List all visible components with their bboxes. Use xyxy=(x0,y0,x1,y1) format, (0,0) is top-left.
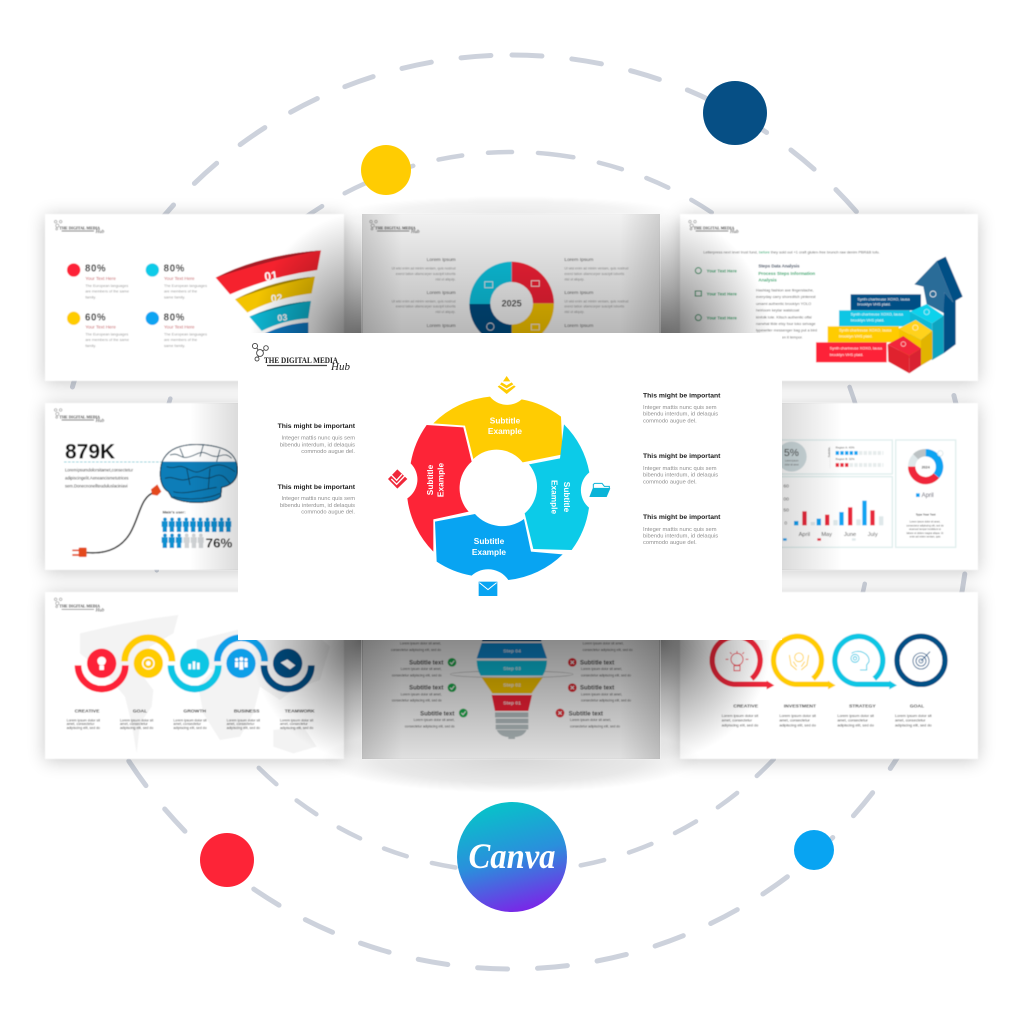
descriptions: amet, consectetur xyxy=(779,719,810,723)
right labels: consectetur adipiscing elit, sed do xyxy=(581,673,631,677)
middle text column: Process Steps Information xyxy=(758,271,815,276)
right captions: exerci tation ullamcorper suscipit lobortis xyxy=(564,272,625,276)
right captions: nisl ut aliquip. xyxy=(564,277,585,281)
shading: bottom middle slide xyxy=(362,640,660,759)
left labels: Lorem ipsum dolor sit amet, xyxy=(400,642,441,646)
donut chart: 2025 xyxy=(502,299,522,309)
left labels: consectetur adipiscing elit, sed do xyxy=(405,724,455,728)
funnel chart xyxy=(216,250,321,338)
right captions: Ut wisi enim ad minim veniam, quis nostrud xyxy=(564,267,628,271)
donut chart xyxy=(469,262,554,346)
stat: cyan 80%: same family. xyxy=(164,296,185,300)
shading: cast on neighbouring slides xyxy=(190,196,842,793)
right labels: consectetur adipiscing elit, sed do xyxy=(570,724,620,728)
left captions: Lorem Ipsum xyxy=(427,323,456,329)
step descriptions: adipiscing elit, sed do xyxy=(173,726,207,730)
left labels: consectetur adipiscing elit, sed do xyxy=(392,673,442,677)
middle text column: Hashtag fashion axe fingerstache, xyxy=(756,289,814,293)
staircase chart: brooklyn VHS plaid. xyxy=(839,335,873,339)
stat: cyan 80%: Your Text Here xyxy=(164,276,195,281)
labels xyxy=(733,703,924,709)
slide: staircase arrow xyxy=(680,214,978,381)
right labels: Lorem ipsum dolor sit amet, xyxy=(581,667,622,671)
right labels: Lorem ipsum dolor sit amet, xyxy=(583,642,624,646)
left labels: Subtitle text xyxy=(409,686,443,692)
slide: light bulb steps xyxy=(362,592,660,759)
left text blocks: bibendu interdum, id delaquis xyxy=(280,442,355,448)
canva badge xyxy=(457,802,567,912)
bar chart: July xyxy=(868,532,878,538)
left labels: consectetur adipiscing elit, sed do xyxy=(392,699,442,703)
left captions: exerci tation ullamcorper suscipit lobortis xyxy=(396,272,456,276)
right text blocks: Integer mattis nunc quis sem xyxy=(643,527,717,533)
logo xyxy=(370,220,420,235)
right text blocks: commodo augue del. xyxy=(643,540,697,546)
left captions: nisl ut aliquip. xyxy=(435,277,456,281)
right labels: consectetur adipiscing elit, sed do xyxy=(581,699,631,703)
step labels: TEAMWORK xyxy=(285,709,315,715)
stat: red 80%: The European languages xyxy=(85,284,128,288)
description xyxy=(65,468,134,488)
descriptions: amet, consectetur xyxy=(837,719,868,723)
donut card: 2024 xyxy=(922,465,931,469)
stat: yellow 60% xyxy=(67,312,129,348)
description: sem.Donecnonellteuduluslaciniavi xyxy=(65,483,128,488)
left text blocks xyxy=(278,423,356,516)
left icon list xyxy=(695,268,737,321)
middle text column: Analysis xyxy=(758,278,777,283)
left labels: consectetur adipiscing elit, sed do xyxy=(391,648,441,652)
stat: cyan 80%: 80% xyxy=(164,264,185,275)
right text blocks: Integer mattis nunc quis sem xyxy=(643,466,717,472)
panel: centre slide xyxy=(238,333,782,640)
right text blocks: commodo augue del. xyxy=(643,418,697,424)
funnel chart: 02 xyxy=(270,293,283,305)
right text blocks: Integer mattis nunc quis sem xyxy=(643,405,717,411)
left labels: Lorem ipsum dolor sit amet, xyxy=(401,692,442,696)
dot: navy xyxy=(703,81,767,145)
descriptions: Lorem ipsum dolor sit xyxy=(779,714,817,718)
descriptions: adipiscing elit, sed do xyxy=(779,723,816,727)
right captions: Ut wisi enim ad minim veniam, quis nostrud xyxy=(564,299,628,303)
stat: yellow 60%: 60% xyxy=(85,312,106,323)
middle text column: umami authentic brooklyn YOLO xyxy=(756,302,811,306)
descriptions: amet, consectetur xyxy=(722,719,753,723)
donut card: consectetur adipiscing elit, sed do xyxy=(906,524,944,527)
dot: yellow xyxy=(361,145,411,195)
right text blocks: commodo augue del. xyxy=(643,479,697,485)
big number: 879K xyxy=(65,440,115,463)
left labels: Lorem ipsum dolor sit amet, xyxy=(401,667,442,671)
bar chart: May xyxy=(821,532,832,538)
logo: Hub xyxy=(95,419,105,424)
left text blocks: commodo augue del. xyxy=(301,449,355,455)
bulb xyxy=(450,639,573,739)
step descriptions: adipiscing elit, sed do xyxy=(67,726,100,730)
staircase chart: brooklyn VHS plaid. xyxy=(851,319,884,323)
left labels: Subtitle text xyxy=(420,711,454,717)
intro line: Letterpress next level trust fund, before they sold out +1 craft gluten-free brunch raw denim PBR&B tofu. xyxy=(703,251,880,255)
segment labels: Example xyxy=(472,547,506,557)
descriptions: Lorem ipsum dolor sit xyxy=(895,714,933,718)
ring icons xyxy=(726,651,930,671)
segment labels: Example xyxy=(488,426,522,436)
dot: blue xyxy=(794,830,834,870)
logo xyxy=(252,343,350,373)
bulb: Step 03 xyxy=(503,666,521,672)
staircase chart: brooklyn VHS plaid. xyxy=(857,303,891,307)
step labels: GOAL xyxy=(133,709,147,715)
step descriptions: Lorem ipsum dolor sit xyxy=(227,718,260,722)
left labels: Lorem ipsum dolor sit amet, xyxy=(414,718,455,722)
segment labels: Subtitle xyxy=(474,536,505,546)
descriptions: amet, consectetur xyxy=(895,719,926,723)
right text blocks: bibendu interdum, id delaquis xyxy=(643,412,718,418)
arrow heads xyxy=(767,681,897,689)
stat: red 80%: Your Text Here xyxy=(85,276,116,281)
ring arrows xyxy=(712,636,945,684)
dashed outer orbit xyxy=(55,55,969,969)
bulb: Step 02 xyxy=(503,683,521,689)
segment labels: Example xyxy=(550,480,560,514)
step labels: CREATIVE xyxy=(75,709,100,715)
step descriptions xyxy=(67,718,313,730)
logo: THE DIGITAL MEDIA xyxy=(59,604,100,609)
brain icon xyxy=(160,445,237,502)
dashed inner orbit xyxy=(116,116,908,908)
left labels: Subtitle text xyxy=(409,660,443,666)
segment labels: Subtitle xyxy=(562,482,572,513)
donut card: Type Your Text xyxy=(916,512,936,516)
funnel chart: 01 xyxy=(263,268,279,284)
stat: red 80%: are members of the same xyxy=(85,290,129,294)
segment: yellow xyxy=(433,397,563,462)
descriptions: Lorem ipsum dolor sit xyxy=(837,714,875,718)
middle text column xyxy=(756,264,817,339)
left text blocks: Integer mattis nunc quis sem xyxy=(281,496,355,502)
right text blocks: bibendu interdum, id delaquis xyxy=(643,473,718,479)
bar chart: 0 xyxy=(784,521,787,527)
left text blocks: bibendu interdum, id delaquis xyxy=(280,503,355,509)
segment: blue xyxy=(435,514,563,580)
logo: Hub xyxy=(729,230,739,235)
green checks xyxy=(448,658,468,717)
canva badge: Canva xyxy=(468,836,556,876)
top card: Subtitle xyxy=(827,447,831,457)
step descriptions: Lorem ipsum dolor sit xyxy=(280,718,313,722)
donut card xyxy=(896,440,956,547)
world map xyxy=(80,615,330,753)
step descriptions: amet, consectetur xyxy=(227,722,255,726)
logo: THE DIGITAL MEDIA xyxy=(264,356,338,365)
labels: INVESTMENT xyxy=(784,703,816,709)
left labels xyxy=(391,642,455,728)
stat: yellow 60%: Your Text Here xyxy=(85,325,116,330)
labels: STRATEGY xyxy=(849,703,876,709)
bar chart xyxy=(742,477,892,547)
icon: checked tile xyxy=(388,469,407,489)
logo xyxy=(689,220,739,235)
left icon list: Your Text Here xyxy=(707,268,737,273)
left captions xyxy=(392,257,456,329)
step descriptions: amet, consectetur xyxy=(280,722,309,726)
step descriptions: adipiscing elit, sed do xyxy=(280,726,313,730)
labels: CREATIVE xyxy=(733,703,759,709)
right labels: Subtitle text xyxy=(580,686,614,692)
slide: 2025 donut xyxy=(362,214,660,381)
slide: timeline waves xyxy=(45,592,344,759)
descriptions: adipiscing elit, sed do xyxy=(837,723,874,727)
right text blocks: This might be important xyxy=(643,514,721,521)
right captions: exerci tation ullamcorper suscipit lobortis xyxy=(564,305,625,309)
logo: THE DIGITAL MEDIA xyxy=(375,225,416,230)
segment labels: Subtitle xyxy=(425,464,435,495)
right captions: Lorem Ipsum xyxy=(564,290,593,296)
right labels: Lorem ipsum dolor sit amet, xyxy=(581,692,622,696)
stat: red 80% xyxy=(67,263,129,300)
funnel chart: 03 xyxy=(277,312,288,323)
people pictogram: 76% xyxy=(206,536,232,551)
logo: Hub xyxy=(95,608,105,613)
stat: blue 80%: The European languages xyxy=(164,332,207,336)
right text blocks: This might be important xyxy=(643,453,721,460)
right text blocks: This might be important xyxy=(643,392,721,400)
left captions: Ut wisi enim ad minim veniam, quis nostrud xyxy=(392,299,456,303)
step descriptions: Lorem ipsum dolor sit xyxy=(173,718,207,722)
stat: cyan 80% xyxy=(146,263,207,300)
top card xyxy=(742,440,892,474)
step descriptions: amet, consectetur xyxy=(173,722,202,726)
segment: cyan xyxy=(525,424,589,550)
logo: THE DIGITAL MEDIA xyxy=(59,414,100,419)
stat: blue 80%: Your Text Here xyxy=(164,325,195,330)
right text blocks: bibendu interdum, id delaquis xyxy=(643,534,718,540)
right labels: Subtitle text xyxy=(580,660,614,666)
left text blocks: This might be important xyxy=(278,484,356,491)
donut card: April xyxy=(922,493,934,499)
step descriptions: adipiscing elit, sed do xyxy=(227,726,260,730)
icon: folder xyxy=(589,483,610,497)
bar chart: June xyxy=(844,532,856,538)
step labels: BUSINESS xyxy=(234,709,260,715)
step descriptions: amet, consectetur xyxy=(120,722,149,726)
top card: Region B: 32% xyxy=(836,457,855,461)
logo: Hub xyxy=(410,230,420,235)
stat: yellow 60%: are members of the same xyxy=(85,338,129,342)
segment: red xyxy=(407,425,472,552)
step labels: GROWTH xyxy=(183,709,206,715)
slide: dashboard charts xyxy=(680,403,978,570)
bulb: Step 01 xyxy=(503,700,521,706)
small slide shadows xyxy=(45,216,978,761)
icon: envelope xyxy=(479,582,497,596)
descriptions: Lorem ipsum dolor sit xyxy=(722,714,759,718)
step descriptions: adipiscing elit, sed do xyxy=(120,726,153,730)
labels: GOAL xyxy=(910,703,924,709)
descriptions: adipiscing elit, sed do xyxy=(722,723,758,727)
middle text column: on it tempor. xyxy=(782,335,803,339)
staircase chart: Synth chartreuse XOXO, lausa xyxy=(857,297,911,301)
right labels: Lorem ipsum dolor sit amet, xyxy=(570,718,611,722)
left captions: Lorem Ipsum xyxy=(427,290,456,296)
slide: ring arrows xyxy=(680,592,978,759)
logo xyxy=(54,409,105,424)
left text blocks: This might be important xyxy=(278,423,356,430)
step descriptions: Lorem ipsum dolor sit xyxy=(120,718,153,722)
right labels: consectetur adipiscing elit, sed do xyxy=(583,648,633,652)
dashed divider xyxy=(64,461,164,463)
staircase chart: Synth chartreuse XOXO, lausa xyxy=(830,347,883,351)
step labels xyxy=(75,709,315,715)
bar chart: 50 xyxy=(783,508,789,514)
middle text column: kinfolk tote. Kitsch authentic offal xyxy=(756,315,812,319)
stat: blue 80%: same family. xyxy=(164,344,185,348)
logo xyxy=(54,220,105,235)
shading: top middle slide xyxy=(362,214,660,333)
donut card: labore et dolore magna aliqua. Ut xyxy=(907,532,944,535)
right labels xyxy=(569,642,633,728)
stat: blue 80% xyxy=(146,312,207,348)
top card: Region A: 43% xyxy=(836,446,855,450)
description: Loremipsumdolorsitamet,consectetur xyxy=(65,468,134,473)
step descriptions: amet, consectetur xyxy=(67,722,95,726)
people pictogram xyxy=(162,509,232,551)
left captions: nisl ut aliquip. xyxy=(435,310,456,314)
cycle diagram xyxy=(388,376,610,596)
right text blocks xyxy=(643,392,721,546)
red crosses xyxy=(556,658,577,717)
logo xyxy=(54,598,105,613)
power cord and plugs xyxy=(72,484,161,557)
segment labels: Subtitle xyxy=(490,416,521,426)
top card: Lorem ipsum xyxy=(785,460,798,463)
segment labels xyxy=(425,416,572,557)
bulb: Step 04 xyxy=(503,648,521,654)
stat: yellow 60%: The European languages xyxy=(85,332,128,336)
left icon list: Your Text Here xyxy=(707,292,737,297)
slide: funnel percentages xyxy=(45,214,344,381)
middle text column: typewriter messenger bag put a bird xyxy=(756,329,817,333)
staircase chart: Synth chartreuse XOXO, lausa xyxy=(851,313,904,317)
left text blocks: Integer mattis nunc quis sem xyxy=(281,436,355,442)
slide: brain 879K xyxy=(44,402,238,570)
middle text column: narwhal tilde etsy four loko selvage xyxy=(756,322,816,326)
people pictogram: Male's user: xyxy=(163,509,186,514)
dot: red xyxy=(200,833,254,887)
top card: dolor sit amet xyxy=(785,463,799,466)
stat: yellow 60%: family. xyxy=(85,344,96,348)
bar chart: April xyxy=(799,532,810,538)
bar chart: 00 xyxy=(783,497,789,503)
right labels: Subtitle text xyxy=(569,711,603,717)
right captions: Lorem Ipsum xyxy=(564,323,593,329)
logo: Hub xyxy=(95,230,105,235)
middle text column: heirloom keytar waistcoat xyxy=(756,309,800,313)
stat: red 80%: family. xyxy=(85,296,96,300)
donut card: enim ad minim veniam, quis xyxy=(910,535,941,538)
descriptions xyxy=(722,714,933,727)
stat: red 80%: 80% xyxy=(85,264,106,275)
left icon list: Your Text Here xyxy=(707,315,737,320)
left captions: exerci tation ullamcorper suscipit lobortis xyxy=(396,305,456,309)
donut card: eiusmod tempor incididunt ut xyxy=(909,528,941,531)
left text blocks: commodo augue del. xyxy=(301,510,355,516)
middle text column: everyday carry shoreditch pinterest xyxy=(756,295,817,299)
description: adipiscingelit.Aeneancismetutrices xyxy=(65,475,129,480)
staircase chart: brooklyn VHS plaid. xyxy=(830,353,863,357)
descriptions: adipiscing elit, sed do xyxy=(895,723,932,727)
right captions: Lorem Ipsum xyxy=(564,257,593,263)
bar chart: 60 xyxy=(783,484,789,490)
right captions: nisl ut aliquip. xyxy=(564,310,585,314)
stat: blue 80%: are members of the xyxy=(164,338,197,342)
top card: 5% xyxy=(784,448,799,459)
right captions xyxy=(564,257,628,329)
staircase chart: Synth chartreuse XOXO, lausa xyxy=(839,329,892,333)
middle text column: Steps Data Analysis xyxy=(758,264,800,269)
logo: THE DIGITAL MEDIA xyxy=(694,225,734,230)
staircase chart xyxy=(816,257,963,373)
stat: blue 80%: 80% xyxy=(164,312,185,323)
icon: pyramid xyxy=(498,376,516,394)
donut card: Lorem ipsum dolor sit amet, xyxy=(910,520,941,523)
logo: Hub xyxy=(330,361,350,373)
left captions: Ut wisi enim ad minim veniam, quis nostrud xyxy=(392,267,456,271)
segment labels: Example xyxy=(436,463,446,497)
step circles xyxy=(87,649,302,678)
stat: cyan 80%: The European languages xyxy=(164,284,207,288)
wave arcs xyxy=(78,638,311,689)
step descriptions: Lorem ipsum dolor sit xyxy=(67,718,100,722)
logo: THE DIGITAL MEDIA xyxy=(59,225,100,230)
left captions: Lorem Ipsum xyxy=(427,257,456,263)
stat: cyan 80%: are members of the xyxy=(164,290,197,294)
